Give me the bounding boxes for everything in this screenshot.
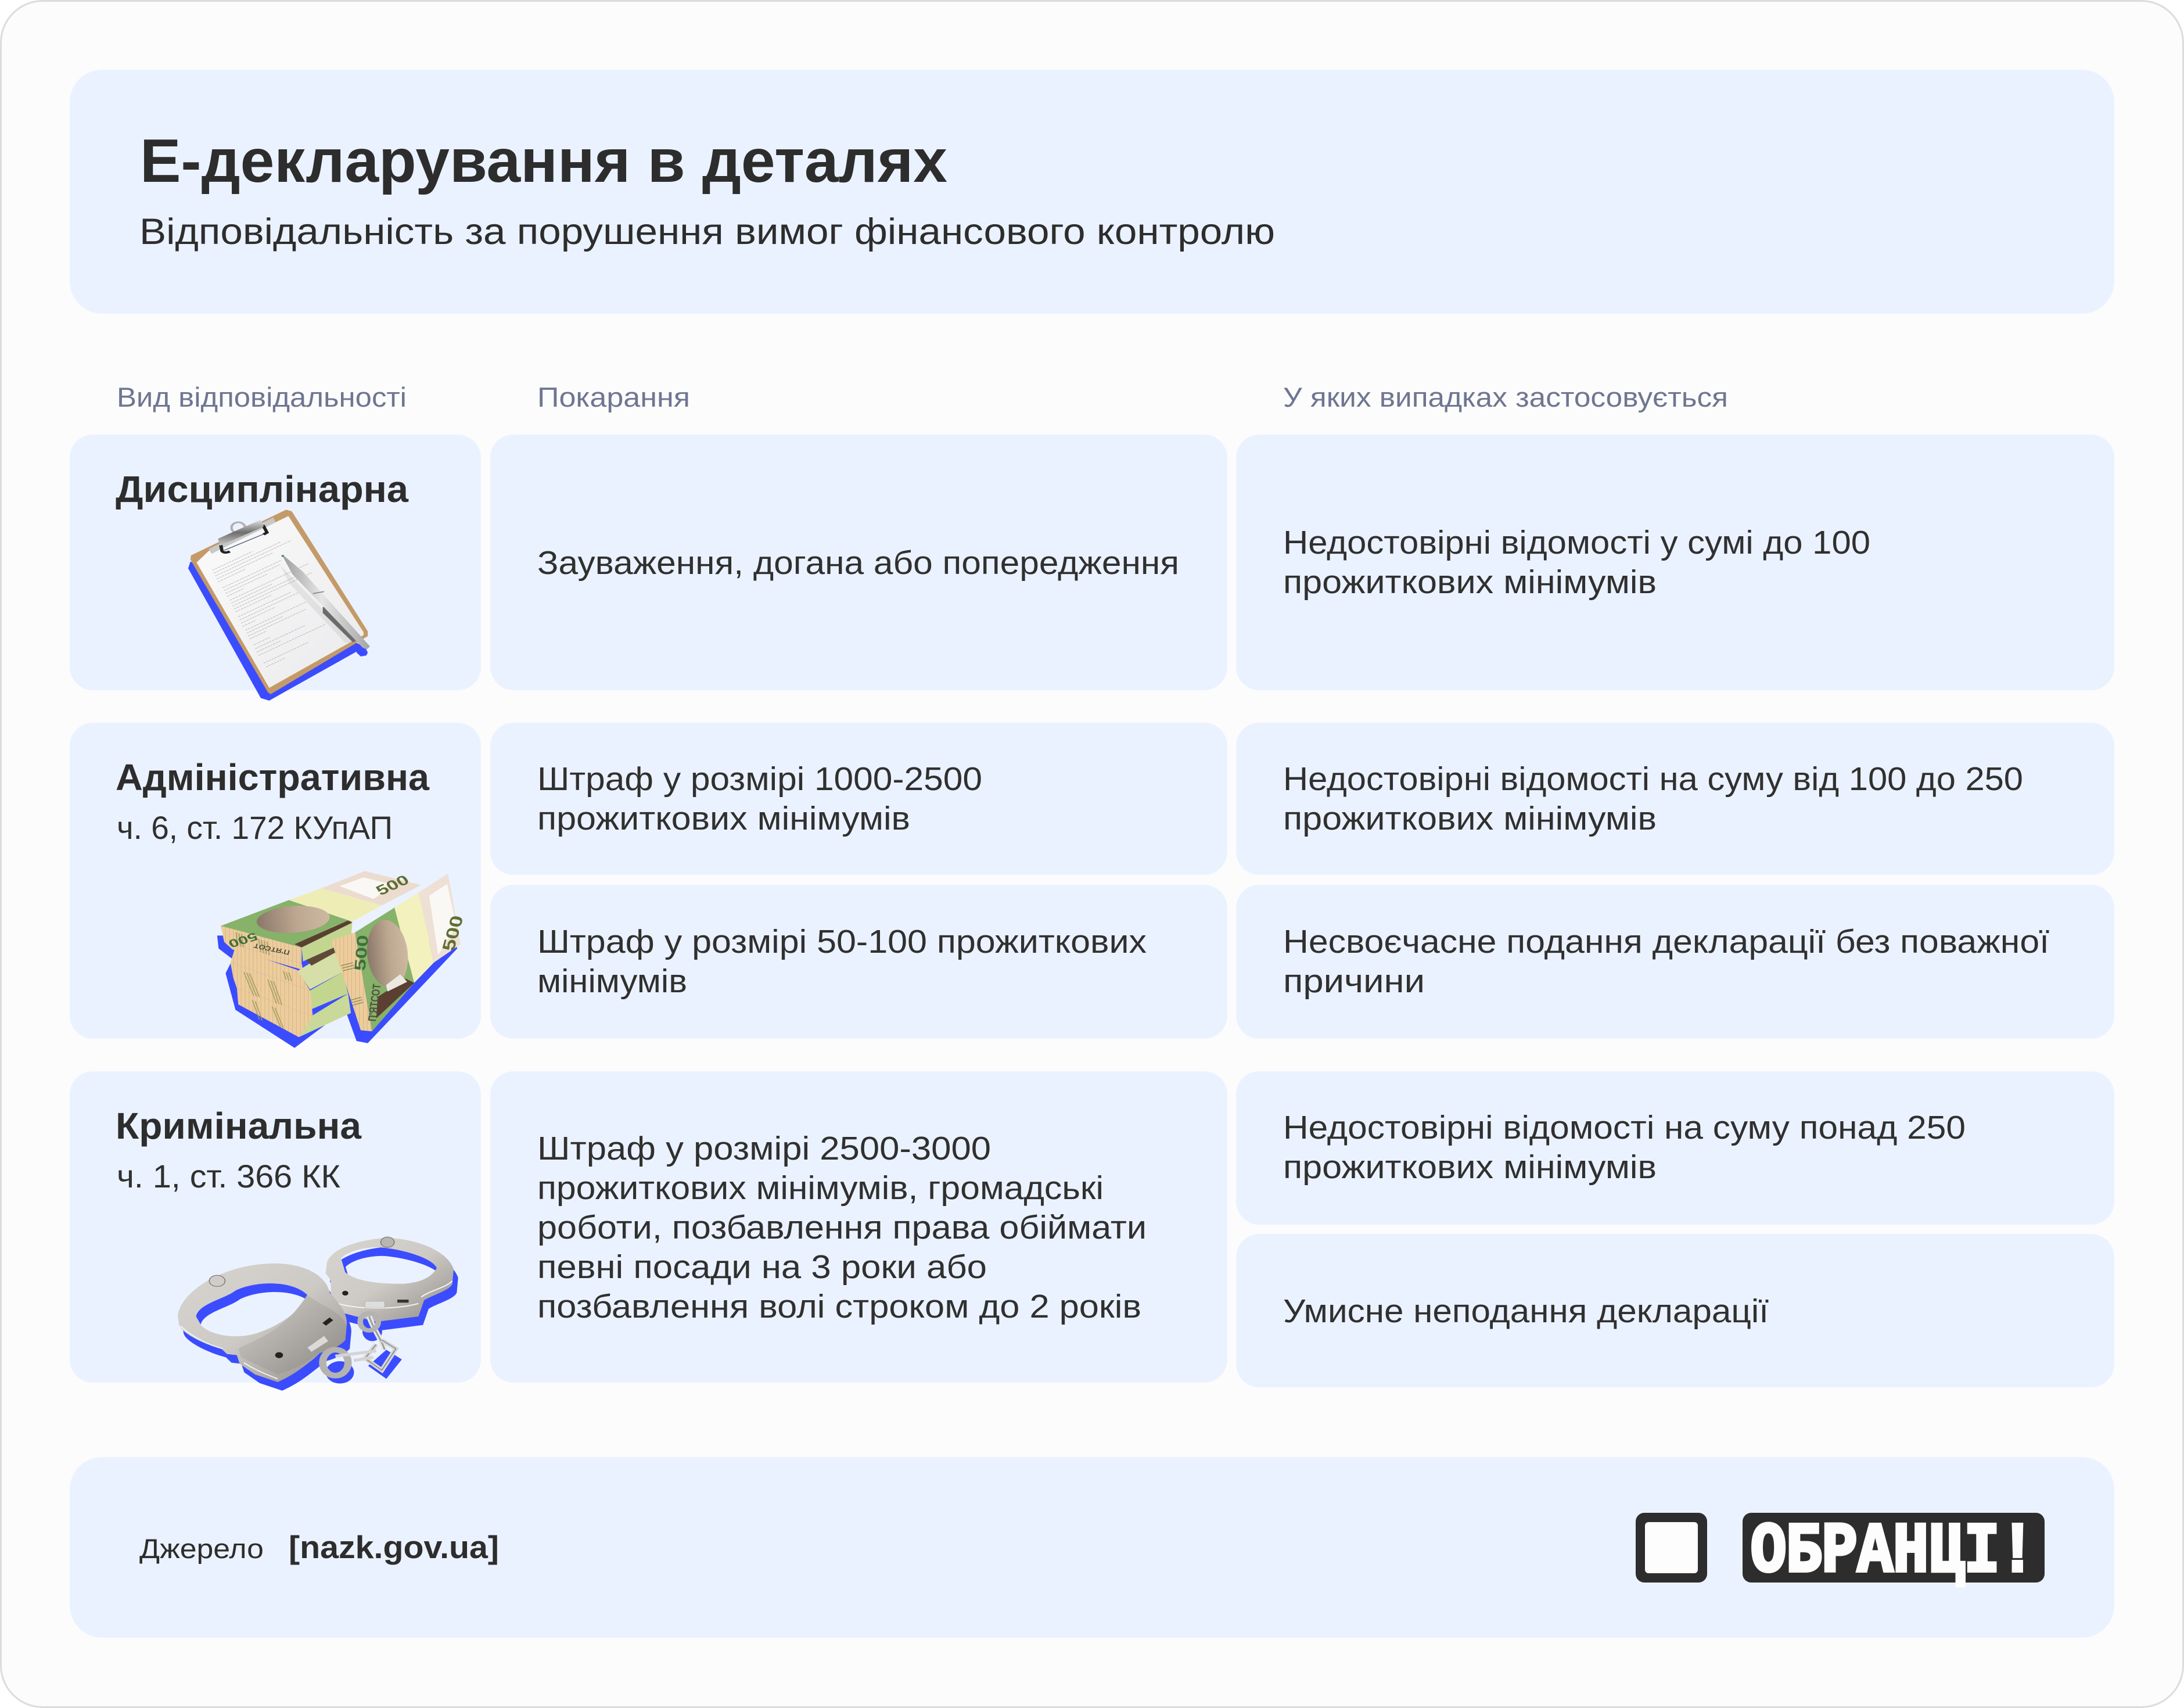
- panel: administrative penalty 2: [490, 885, 1227, 1039]
- panel: administrative penalty 1: прожиткових мінімумів: [537, 800, 910, 837]
- icon: clipboard with pen: [188, 509, 370, 701]
- panel: criminal penalty: роботи, позбавлення права обіймати: [537, 1209, 1147, 1246]
- panel: disciplinary cases: [1236, 435, 2114, 690]
- header panel: [70, 70, 2114, 314]
- panel: criminal penalty: позбавлення волі строком до 2 років: [537, 1288, 1141, 1325]
- panel: administrative cases 1: Недостовірні відомості на суму від 100 до 250: [1283, 760, 2023, 798]
- source label: Джерело: [139, 1533, 264, 1564]
- panel: criminal cases 1: [1236, 1071, 2114, 1225]
- legal reference: criminal: ч. 1, ст. 366 КК: [117, 1158, 340, 1194]
- panel: disciplinary cases: Недостовірні відомості у сумі до 100: [1283, 524, 1870, 561]
- icon: stacks of hryvnia banknotes: [217, 871, 468, 1048]
- logo: wordmark: ОБРАНЦІ!: [1751, 1512, 2035, 1592]
- icon: handcuffs: [178, 1237, 458, 1391]
- heading: disciplinary: Дисциплінарна: [116, 468, 408, 510]
- heading: penalty: Покарання: [537, 382, 690, 412]
- row: disciplinary: [70, 435, 2114, 701]
- panel: disciplinary penalty: Зауваження, догана або попередження: [537, 544, 1179, 582]
- heading: type of liability: Вид відповідальності: [117, 382, 407, 412]
- panel: administrative cases 2: [1236, 885, 2114, 1039]
- subtitle: Відповідальність за порушення вимог фінансового контролю: [139, 211, 1275, 252]
- panel: administrative penalty 2: мінімумів: [537, 963, 687, 1000]
- panel: criminal cases 2: [1236, 1234, 2114, 1387]
- row: administrative: [70, 723, 2114, 1048]
- panel: administrative penalty 1: [490, 723, 1227, 875]
- heading: criminal: Кримінальна: [116, 1105, 361, 1147]
- icon: stacks of hryvnia banknotes: 500: [351, 935, 372, 971]
- panel: criminal cases 2: Умисне неподання декларації: [1283, 1293, 1769, 1330]
- icon: stacks of hryvnia banknotes: 500: [439, 914, 468, 952]
- panel: criminal cases 1: Недостовірні відомості на суму понад 250: [1283, 1109, 1966, 1146]
- panel: disciplinary type: [70, 435, 481, 701]
- panel: administrative cases 2: причини: [1283, 963, 1425, 1000]
- heading: when applied: У яких випадках застосовується: [1283, 382, 1728, 412]
- panel: criminal penalty: Штраф у розмірі 2500-3000: [537, 1130, 991, 1167]
- icon: stacks of hryvnia banknotes: 500: [373, 872, 412, 899]
- column headings: [117, 382, 1728, 412]
- panel: administrative type: [70, 723, 481, 1048]
- heading: administrative: Адміністративна: [116, 756, 429, 798]
- panel: criminal type: [70, 1071, 481, 1391]
- legal reference: administrative: ч. 6, ст. 172 КУпАП: [117, 809, 393, 846]
- panel: administrative cases 2: Несвоєчасне подання декларації без поважної: [1283, 923, 2049, 960]
- panel: criminal cases 1: прожиткових мінімумів: [1283, 1149, 1657, 1186]
- panel: criminal penalty: певні посади на 3 роки або: [537, 1248, 987, 1286]
- icon: stacks of hryvnia banknotes: 500: [226, 930, 260, 950]
- panel: administrative penalty 1: Штраф у розмірі 1000-2500: [537, 760, 982, 798]
- footer panel: [70, 1457, 2114, 1638]
- panel: administrative cases 1: прожиткових мінімумів: [1283, 800, 1657, 837]
- panel: criminal penalty: [490, 1071, 1227, 1383]
- logo: square mark: [1636, 1513, 1707, 1583]
- panel: criminal penalty: прожиткових мінімумів, громадські: [537, 1169, 1104, 1207]
- panel: disciplinary cases: прожиткових мінімумів: [1283, 564, 1657, 601]
- panel: administrative penalty 2: Штраф у розмірі 50-100 прожиткових: [537, 923, 1147, 960]
- panel: administrative cases 1: [1236, 723, 2114, 875]
- icon: stacks of hryvnia banknotes: П'ЯТСОТ: [253, 942, 291, 956]
- icon: stacks of hryvnia banknotes: П'ЯТСОТ: [365, 983, 383, 1022]
- title: Е-декларування в деталях: [140, 127, 947, 195]
- source link: [nazk.gov.ua]: [289, 1529, 499, 1565]
- panel: disciplinary penalty: [490, 435, 1227, 690]
- row: criminal: [70, 1071, 2114, 1391]
